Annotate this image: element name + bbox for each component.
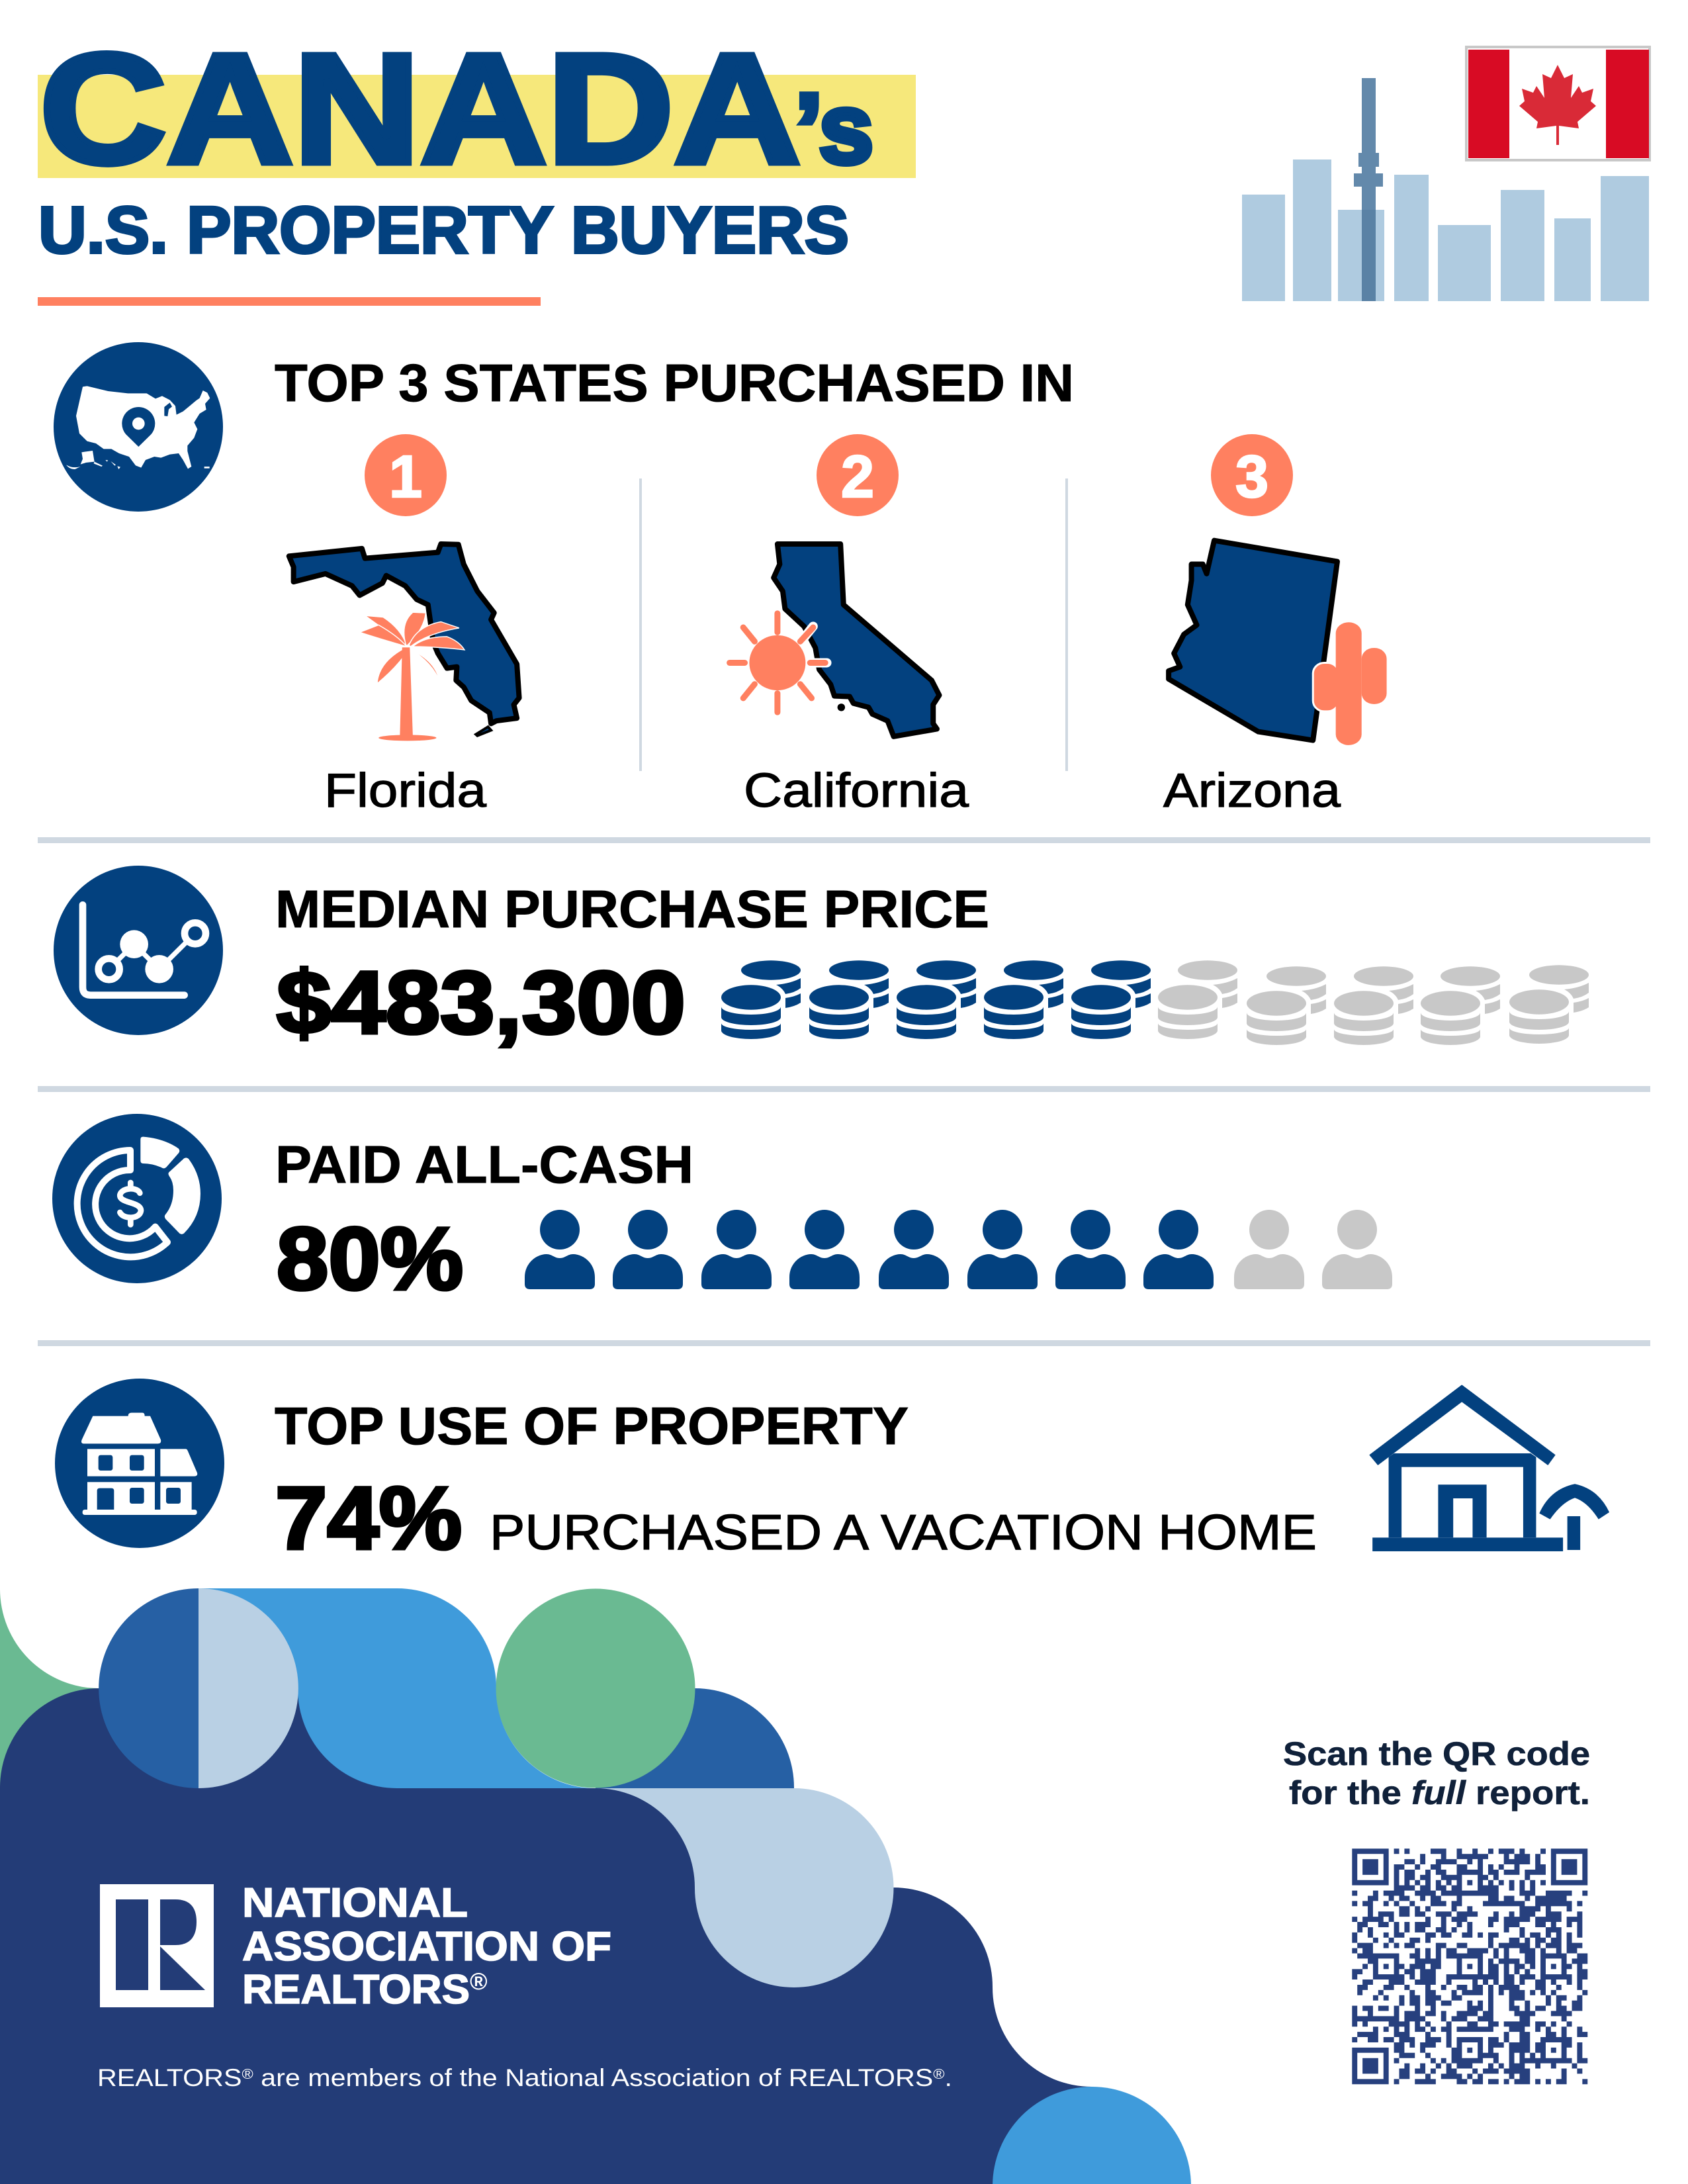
icon: Florida map with palm tree (289, 544, 519, 741)
panel: top 3 states (54, 342, 1387, 817)
disclaimer: are members of the National Association of REALTORS (253, 2064, 933, 2091)
call to action: for the full report. (1289, 1774, 1590, 1811)
heading: CANADA's: ’s (795, 73, 873, 184)
disclaimer: . (945, 2064, 952, 2091)
organisation name: ® (470, 1968, 488, 1995)
label: Florida: Florida (324, 764, 487, 817)
rank 3 badge (1211, 434, 1293, 516)
call to action (1283, 1735, 1590, 1811)
icon: US map with pin (54, 342, 223, 512)
rank 2 badge: 2 (841, 444, 874, 510)
label: California: California (744, 764, 969, 817)
half circle dark (99, 1588, 199, 1788)
heading: TOP 3 STATES PURCHASED IN (275, 353, 1074, 412)
green circle (496, 1588, 695, 1788)
mid blue shape (596, 1688, 794, 1788)
organisation name: REALTORS (242, 1967, 470, 2013)
half circle pale (199, 1588, 298, 1788)
QR code (1352, 1848, 1587, 2084)
green corner shape (0, 1588, 99, 1788)
value: 80% (277, 1210, 463, 1308)
bright blue shape (199, 1588, 596, 1788)
icon: line chart (54, 866, 223, 1035)
icon: California map with sun (730, 544, 939, 737)
icon: Toronto skyline (1242, 78, 1649, 301)
title: Canada's U.S. Property Buyers (38, 21, 916, 306)
value: 74% (275, 1469, 462, 1568)
logo: REALTOR R block (100, 1884, 214, 2007)
heading: PAID ALL-CASH (275, 1135, 693, 1194)
disclaimer: ® (242, 2067, 253, 2082)
icon: two-story house (55, 1379, 224, 1548)
heading: MEDIAN PURCHASE PRICE (275, 880, 989, 938)
footer: decorative shapes and branding (0, 1588, 1191, 2184)
pale blue shape (596, 1788, 893, 1987)
caption: PURCHASED A VACATION HOME (490, 1504, 1317, 1560)
icon: Canadian flag (1466, 47, 1650, 160)
disclaimer: REALTORS (97, 2064, 227, 2091)
organisation name: ASSOCIATION OF (242, 1924, 611, 1970)
organisation name: NATIONAL (242, 1880, 468, 1926)
title underline (38, 297, 541, 306)
subheading: U.S. PROPERTY BUYERS (38, 193, 849, 267)
heading: TOP USE OF PROPERTY (275, 1396, 909, 1455)
title highlight (38, 75, 916, 178)
value: $483,300 (277, 954, 686, 1052)
rank 2 badge (817, 434, 899, 516)
disclaimer: ® (933, 2067, 945, 2082)
panel: median purchase price (54, 866, 1589, 1052)
pictogram: coin stacks, 5 of 10 filled (721, 960, 1589, 1045)
pictogram: people, 8 of 10 filled (525, 1210, 1392, 1289)
icon: Arizona map with cactus (1169, 541, 1387, 745)
navy background shape (0, 1688, 1092, 2184)
call to action: Scan the QR code (1283, 1735, 1590, 1772)
bottom blue circle (993, 2087, 1191, 2184)
rank 1 badge: 1 (389, 444, 422, 510)
label: Arizona: Arizona (1163, 764, 1341, 817)
panel: top use of property (55, 1379, 1609, 1568)
rank 3 badge: 3 (1235, 444, 1268, 510)
panel: paid all-cash (52, 1114, 1392, 1308)
rank 1 badge (365, 434, 447, 516)
icon: dollar pie chart (52, 1114, 222, 1283)
organisation name (242, 1880, 611, 2013)
icon: vacation home (1369, 1385, 1609, 1551)
heading: CANADA's: CANADA (40, 21, 801, 197)
